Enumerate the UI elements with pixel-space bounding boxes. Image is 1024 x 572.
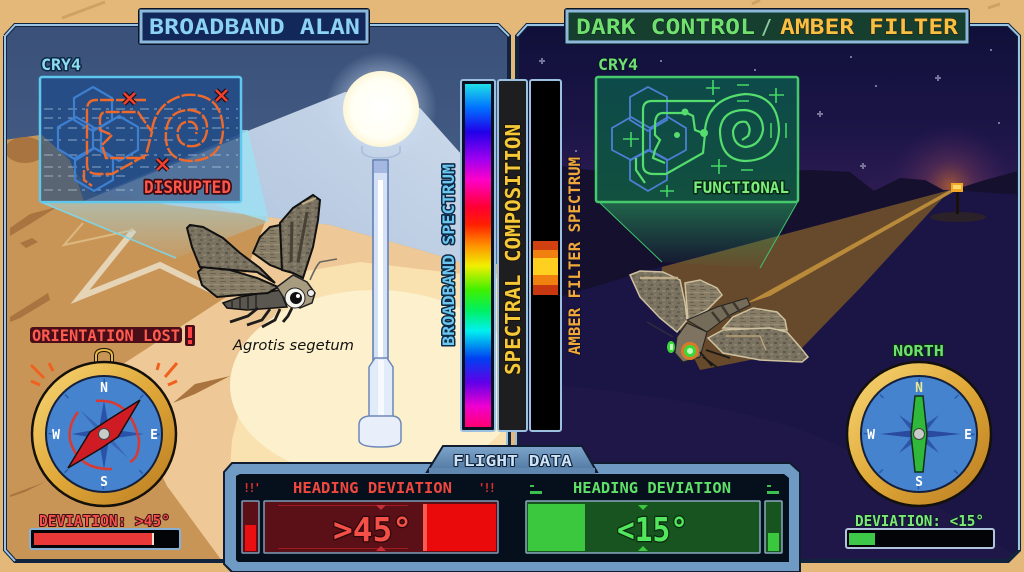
panel: flight data (224, 446, 800, 572)
compass rose (72, 400, 144, 470)
night sky (519, 27, 1017, 190)
sand ground (4, 135, 512, 565)
lamp post (373, 160, 388, 400)
error marks (124, 90, 227, 170)
heading: dark control and amber filter: AMBER FILTER (780, 15, 958, 39)
disrupted circuit (84, 95, 223, 186)
label: north: NORTH (893, 342, 944, 360)
abdomen (223, 290, 287, 310)
projection beam (41, 202, 268, 258)
hexagons (58, 87, 138, 191)
ground (516, 190, 1022, 565)
readout: right deviation (846, 512, 994, 548)
inner screen (236, 474, 789, 562)
heading: broadband ALAN: BROADBAND ALAN (149, 15, 360, 39)
green needle (911, 396, 927, 472)
spectrum: composition column (498, 80, 527, 445)
label: species name: Agrotis segetum (232, 338, 354, 354)
warning glyphs: !!' (243, 481, 261, 495)
label: DISRUPTED: DISRUPTED (144, 178, 231, 198)
right small gauge (765, 501, 782, 553)
tab label: FLIGHT DATA (453, 452, 572, 470)
compass: north: E (964, 428, 972, 443)
left small gauge (242, 501, 259, 553)
inner wing (685, 280, 722, 320)
label: CRY4: CRY4 (598, 55, 638, 74)
left forewing (630, 271, 687, 332)
moth: disoriented (187, 195, 337, 327)
progress bar (846, 529, 994, 548)
dilated eye (285, 288, 305, 308)
moth: oriented (630, 271, 808, 368)
alarm sparks (31, 363, 177, 385)
compass: lost: S (100, 475, 108, 490)
sky (4, 24, 512, 264)
hind wing (198, 267, 278, 297)
needle (68, 400, 140, 468)
lamp halo (330, 55, 434, 121)
legs (700, 350, 730, 368)
progress bar (30, 529, 180, 549)
label: amber filter spectrum: AMBER FILTER SPECTRUM (565, 157, 584, 355)
compass: lost (31, 350, 177, 506)
label: FUNCTIONAL: FUNCTIONAL (693, 178, 789, 197)
antenna (310, 259, 337, 280)
compass: lost: W (52, 428, 60, 443)
compass: north: W (867, 428, 875, 443)
projection beam (600, 203, 797, 268)
readout: left deviation (30, 512, 180, 549)
hologram: disrupted CRY4 (40, 55, 269, 258)
readout: left deviation: DEVIATION: >45° (39, 512, 170, 530)
right forewing (708, 328, 808, 362)
legs (230, 308, 292, 327)
antenna (647, 322, 673, 337)
heading: dark control and amber filter (565, 9, 969, 44)
heading: dark control and amber filter: / (761, 15, 772, 39)
outer frame (224, 463, 800, 572)
amber beam (660, 190, 950, 370)
stars (539, 49, 1000, 169)
heading: broadband ALAN (139, 9, 369, 44)
panel: broadband ALAN (4, 24, 520, 565)
panel: dark control (516, 24, 1022, 565)
right title: HEADING DEVIATION (573, 479, 731, 497)
sparkles (623, 80, 786, 197)
left forewing (187, 225, 275, 283)
compass: north: S (915, 475, 923, 490)
hologram: functional CRY4 (596, 55, 798, 268)
icon: distant amber lamp (951, 183, 963, 214)
compass: lost: N (100, 381, 108, 396)
glitch lines (44, 109, 238, 190)
abdomen (687, 298, 750, 332)
tick marks (866, 381, 972, 487)
panel: flight data: >45° (333, 510, 412, 549)
ok glyphs (530, 485, 779, 494)
right main gauge (526, 501, 760, 553)
tab (427, 446, 597, 472)
sand shadows (10, 207, 230, 497)
cream pool (230, 290, 501, 462)
spectrum: composition column: SPECTRAL COMPOSITION (501, 124, 525, 375)
pale sand pool (230, 262, 506, 463)
lit sand (117, 217, 512, 565)
back wing (253, 225, 283, 270)
functional circuit (636, 94, 779, 183)
compass: lost: E (150, 428, 158, 443)
spectrum: broadband (461, 80, 495, 431)
warning glyphs (243, 481, 496, 495)
light pool (930, 212, 986, 222)
label: CRY4: CRY4 (41, 55, 81, 74)
hills (516, 160, 1022, 310)
red arc (70, 401, 139, 469)
label: broadband spectrum: BROADBAND SPECTRUM (439, 164, 458, 346)
head and thorax (277, 275, 315, 308)
glowing eyes (681, 342, 699, 360)
head and thorax (675, 323, 707, 362)
left main gauge (264, 501, 498, 553)
warning glyphs: '!! (478, 481, 496, 495)
panel frame (5, 25, 509, 561)
amber glow (902, 135, 998, 190)
callout: orientation lost: ORIENTATION LOST (32, 326, 180, 345)
zigzag flight path (64, 223, 215, 297)
compass: north (847, 362, 991, 506)
spectrum: amber filter (530, 80, 561, 431)
hexagons (612, 87, 686, 191)
light cone (100, 92, 460, 262)
icon: street lamp (343, 71, 419, 447)
right hind wing (723, 308, 787, 330)
heading: dark control and amber filter: DARK CONTROL (576, 15, 755, 39)
readout: right deviation: DEVIATION: <15° (855, 512, 984, 530)
panel frame (517, 25, 1019, 561)
panel: flight data: <15° (617, 510, 688, 549)
left title: HEADING DEVIATION (293, 479, 452, 497)
tick marks (51, 381, 157, 487)
ring loop (96, 350, 112, 362)
upper forewing (280, 195, 320, 278)
see-through scene tints (84, 137, 240, 201)
compass: north: N (915, 381, 923, 396)
bulb (343, 71, 419, 147)
road line (745, 190, 953, 304)
